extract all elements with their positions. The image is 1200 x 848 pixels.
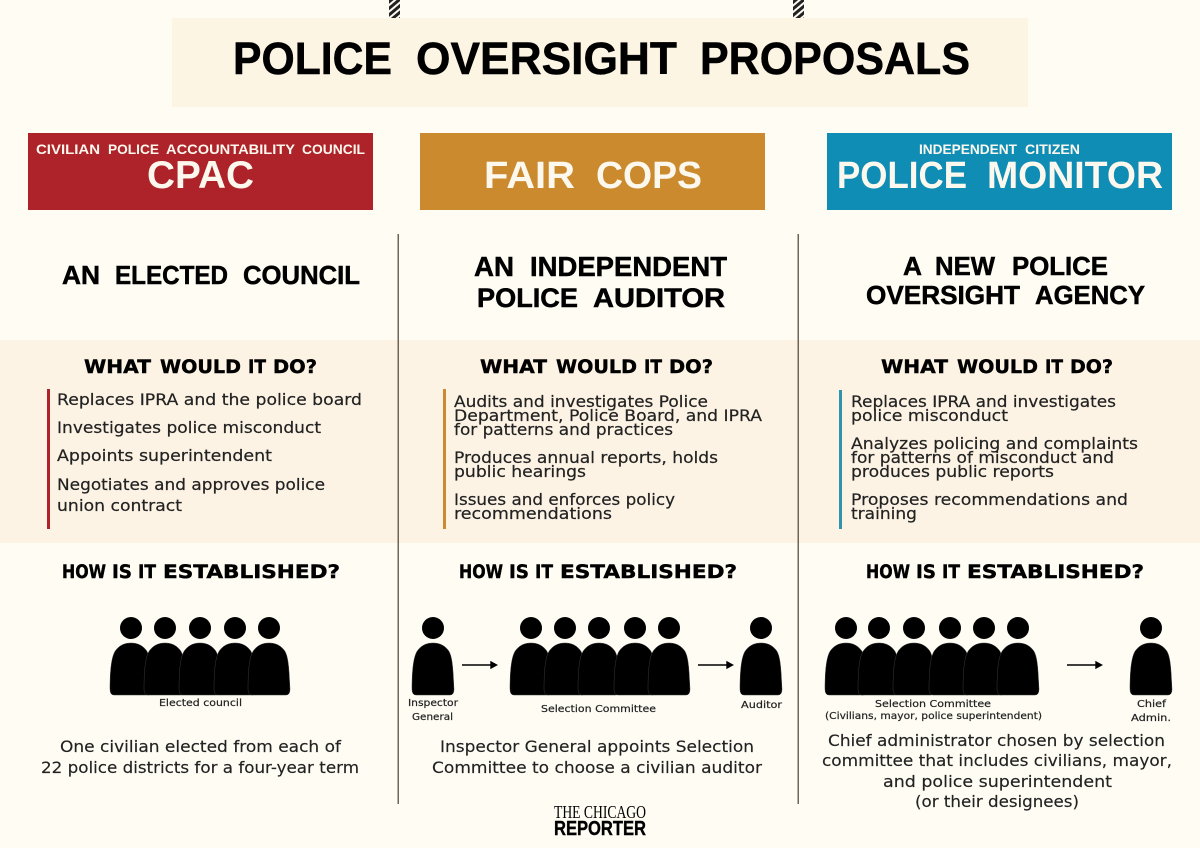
heading: WHAT <box>480 356 547 378</box>
duties list <box>57 390 362 515</box>
duties list: Produces annual reports, holds <box>454 448 718 467</box>
subheading: Fair Cops: POLICE <box>477 283 578 313</box>
description <box>432 737 762 777</box>
heading: ESTABLISHED? <box>560 561 737 583</box>
subheading: CPAC <box>62 260 360 290</box>
subheading: Police Monitor: NEW <box>935 251 995 281</box>
heading: IT <box>942 561 960 583</box>
heading: IS <box>112 561 132 583</box>
caption: selection committee: Selection Committee <box>541 704 656 715</box>
caption: chief administrator <box>1131 699 1171 724</box>
logo: The Chicago Reporter: REPORTER <box>554 818 646 840</box>
heading <box>459 561 737 583</box>
caption: inspector general: Inspector <box>408 698 459 709</box>
banner: CPAC: POLICE <box>108 141 159 157</box>
heading: IT <box>535 561 553 583</box>
subheading: Police Monitor: A <box>903 251 922 281</box>
title: OVERSIGHT <box>416 33 677 84</box>
title panel <box>172 18 1028 107</box>
subheading: Fair Cops: INDEPENDENT <box>530 251 727 282</box>
subheading: Fair Cops: AN <box>474 251 514 282</box>
caption: selection committee: Selection Committee <box>875 699 991 710</box>
hanging tab right <box>793 0 804 19</box>
arrow: to auditor <box>698 662 732 668</box>
description: Chief administrator chosen by selection <box>828 731 1165 750</box>
banner: Fair Cops: COPS <box>596 155 702 197</box>
heading: ESTABLISHED? <box>163 561 340 583</box>
title: POLICE <box>233 33 392 84</box>
banner: Police Monitor: MONITOR <box>987 155 1163 197</box>
duties list: for patterns and practices <box>454 420 673 439</box>
caption: auditor: Auditor <box>741 700 783 711</box>
banner: CPAC: ACCOUNTABILITY <box>166 141 296 157</box>
column divider 1 <box>398 234 399 804</box>
accent bar <box>443 389 446 529</box>
heading: ESTABLISHED? <box>967 561 1144 583</box>
heading: HOW <box>866 561 910 583</box>
icon: chief administrator <box>1130 617 1172 695</box>
heading <box>881 356 1113 378</box>
panel: CPAC duties <box>47 356 362 529</box>
caption: chief administrator: Chief <box>1137 699 1167 710</box>
duties list: Replaces IPRA and investigates <box>851 392 1116 411</box>
logo: The Chicago Reporter <box>554 802 646 840</box>
banner: Police Monitor: INDEPENDENT <box>919 141 1017 157</box>
description: and police superintendent <box>883 772 1112 791</box>
duties list: produces public reports <box>851 462 1054 481</box>
duties list: police misconduct <box>851 406 1008 425</box>
heading: IS <box>916 561 936 583</box>
subheading: Fair Cops: AUDITOR <box>593 283 725 313</box>
heading: WOULD <box>556 356 637 378</box>
heading: WOULD <box>957 356 1038 378</box>
subheading: CPAC: COUNCIL <box>243 260 360 290</box>
description: Committee to choose a civilian auditor <box>432 758 762 777</box>
shaded band: what would it do <box>0 340 1200 543</box>
heading: IT <box>644 356 662 378</box>
icon: auditor <box>740 617 782 695</box>
subheading: Police Monitor: OVERSIGHT <box>866 280 1020 310</box>
duties list: Appoints superintendent <box>57 446 272 465</box>
duties list <box>454 392 762 523</box>
subheading: Police Monitor: POLICE <box>1012 251 1108 281</box>
duties list: Negotiates and approves police <box>57 475 325 494</box>
banner: Police Monitor: POLICE <box>837 155 967 197</box>
caption: inspector general <box>408 698 459 723</box>
heading: IT <box>138 561 156 583</box>
column divider 2 <box>798 234 799 804</box>
duties list: Department, Police Board, and IPRA <box>454 406 762 425</box>
banner: Fair Cops <box>420 133 765 210</box>
banner: CPAC: CPAC <box>147 154 254 197</box>
arrow: to chief administrator <box>1067 662 1102 668</box>
banner: Police Monitor <box>827 133 1172 210</box>
duties list <box>851 392 1138 523</box>
subheading: Fair Cops <box>474 251 727 313</box>
subheading: CPAC: AN <box>62 260 100 290</box>
duties list: for patterns of misconduct and <box>851 448 1114 467</box>
heading: DO? <box>1070 356 1113 378</box>
description <box>41 737 359 777</box>
duties list: recommendations <box>454 504 612 523</box>
caption: selection committee: (Civilians, mayor, police superintendent) <box>825 711 1042 722</box>
accent bar <box>839 390 842 529</box>
description: (or their designees) <box>915 792 1079 811</box>
subheading: Police Monitor: AGENCY <box>1035 280 1145 310</box>
subheading: Police Monitor <box>866 251 1145 310</box>
banner: Police Monitor: CITIZEN <box>1025 141 1080 157</box>
heading: HOW <box>459 561 503 583</box>
description: One civilian elected from each of <box>60 737 341 756</box>
icon: elected council group <box>110 617 290 695</box>
caption: Elected council <box>159 698 242 709</box>
description: committee that includes civilians, mayor, <box>822 751 1172 770</box>
heading: DO? <box>669 356 713 378</box>
duties list: union contract <box>57 496 182 515</box>
accent bar <box>47 389 50 529</box>
heading: IT <box>1045 356 1063 378</box>
logo: The Chicago Reporter: THE CHICAGO <box>554 802 646 822</box>
duties list: Replaces IPRA and the police board <box>57 390 362 409</box>
duties list: Proposes recommendations and <box>851 490 1128 509</box>
description <box>822 731 1172 811</box>
panel: Fair Cops establishment <box>408 561 783 777</box>
duties list: Analyzes policing and complaints <box>851 434 1138 453</box>
icon: selection committee group <box>510 617 690 695</box>
heading <box>84 356 317 378</box>
panel: Fair Cops duties <box>443 356 762 529</box>
heading: IS <box>509 561 529 583</box>
heading: WHAT <box>881 356 948 378</box>
banner: CPAC <box>28 133 373 210</box>
duties list: Issues and enforces policy <box>454 490 675 509</box>
banner: CPAC: CIVILIAN <box>36 141 100 157</box>
caption: inspector general: General <box>412 712 453 723</box>
arrow: to selection committee <box>462 662 496 668</box>
panel: Police Monitor establishment <box>822 561 1172 811</box>
subheading: CPAC: ELECTED <box>115 260 228 290</box>
caption: chief administrator: Admin. <box>1131 713 1171 724</box>
heading <box>480 356 713 378</box>
hanging tab left <box>389 0 400 19</box>
heading: IT <box>248 356 266 378</box>
heading: HOW <box>62 561 106 583</box>
icon: inspector general <box>412 617 454 695</box>
duties list: public hearings <box>454 462 586 481</box>
title: PROPOSALS <box>700 33 970 84</box>
heading: WOULD <box>160 356 241 378</box>
panel: Police Monitor duties <box>839 356 1138 529</box>
duties list: Investigates police misconduct <box>57 418 321 437</box>
caption: selection committee <box>825 699 1042 722</box>
description: Inspector General appoints Selection <box>440 737 754 756</box>
title <box>233 33 970 84</box>
duties list: Audits and investigates Police <box>454 392 708 411</box>
heading <box>62 561 340 583</box>
icon: selection committee group <box>825 617 1039 695</box>
banner: CPAC: COUNCIL <box>302 141 365 157</box>
heading <box>866 561 1144 583</box>
heading: WHAT <box>84 356 151 378</box>
banner: Fair Cops: FAIR <box>484 155 575 197</box>
duties list: training <box>851 504 917 523</box>
heading: DO? <box>273 356 317 378</box>
panel: CPAC establishment <box>41 561 359 777</box>
description: 22 police districts for a four-year term <box>41 758 359 777</box>
